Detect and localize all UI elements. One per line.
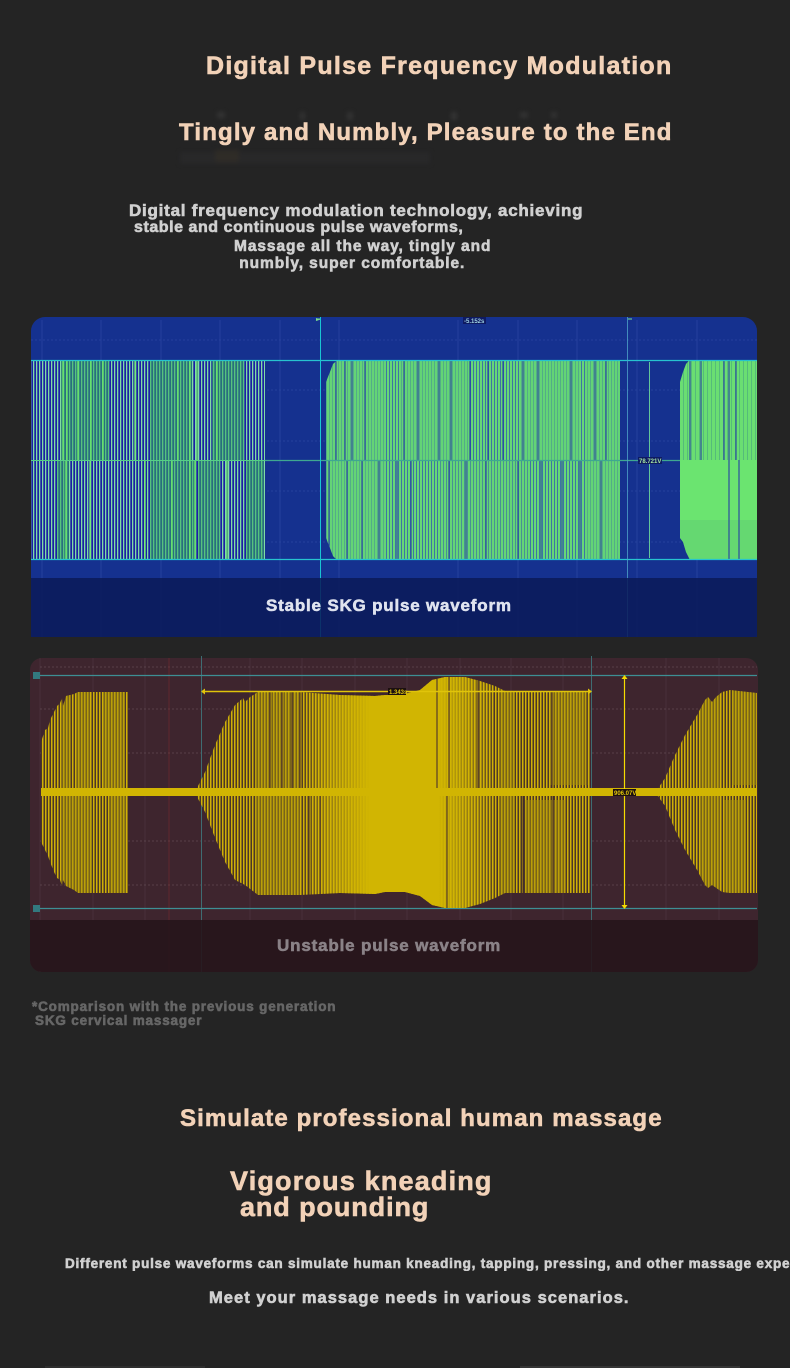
- baseline: [41, 788, 757, 796]
- panel background: [30, 658, 758, 972]
- measurement labels: -5.152s: [464, 319, 485, 325]
- title: Digital Pulse Frequency Modulation: [206, 52, 672, 80]
- scope grid: [31, 320, 757, 578]
- cursor lines: [31, 317, 757, 637]
- measurement arrows and labels: 1.343s: [389, 690, 408, 696]
- caption: Stable SKG pulse waveform: [266, 596, 512, 615]
- handles: [33, 672, 40, 912]
- panel: stable SKG waveform: [31, 317, 757, 637]
- caption: Unstable pulse waveform: [277, 936, 501, 955]
- measurement labels: 78.721V: [639, 459, 661, 465]
- scope grid: [40, 656, 757, 972]
- waveform segment right: [658, 690, 757, 893]
- intro text second block: [234, 238, 491, 272]
- subtitle: Tingly and Numbly, Pleasure to the End: [179, 119, 673, 146]
- waveform segment middle: [196, 675, 590, 910]
- footnote: [32, 999, 336, 1028]
- heading: kneading: and pounding: [240, 1192, 429, 1222]
- cursor lines: [40, 676, 757, 908]
- measurement arrows and labels: 906.07V: [614, 791, 636, 797]
- footnote: *Comparison with the previous generation: [32, 999, 336, 1014]
- heading: simulate massage: Simulate professional human massage: [180, 1105, 663, 1132]
- waveform segment middle: [326, 361, 620, 560]
- footnote: SKG cervical massager: [35, 1012, 202, 1028]
- intro text line two: stable and continuous pulse waveforms,: [134, 219, 463, 236]
- panel: unstable waveform: [30, 656, 758, 972]
- intro text second block: numbly, super comfortable.: [239, 255, 465, 272]
- waveform segment right: [680, 361, 757, 560]
- caption band: [31, 578, 757, 637]
- heading: kneading: [230, 1166, 493, 1222]
- measurement arrows and labels: [201, 675, 636, 909]
- panel background: [31, 317, 757, 637]
- waveform segment left: [31, 361, 265, 560]
- caption band: [30, 920, 758, 972]
- decorative ghost image behind subtitle: [216, 112, 556, 161]
- body text line two: Meet your massage needs in various scenarios.: [209, 1289, 630, 1307]
- intro text second block: Massage all the way, tingly and: [234, 238, 491, 255]
- measurement labels: [316, 317, 662, 465]
- waveform segment left: [41, 690, 128, 895]
- heading: kneading: Vigorous kneading: [230, 1166, 493, 1196]
- intro text: Digital frequency modulation technology, achieving: [129, 201, 583, 220]
